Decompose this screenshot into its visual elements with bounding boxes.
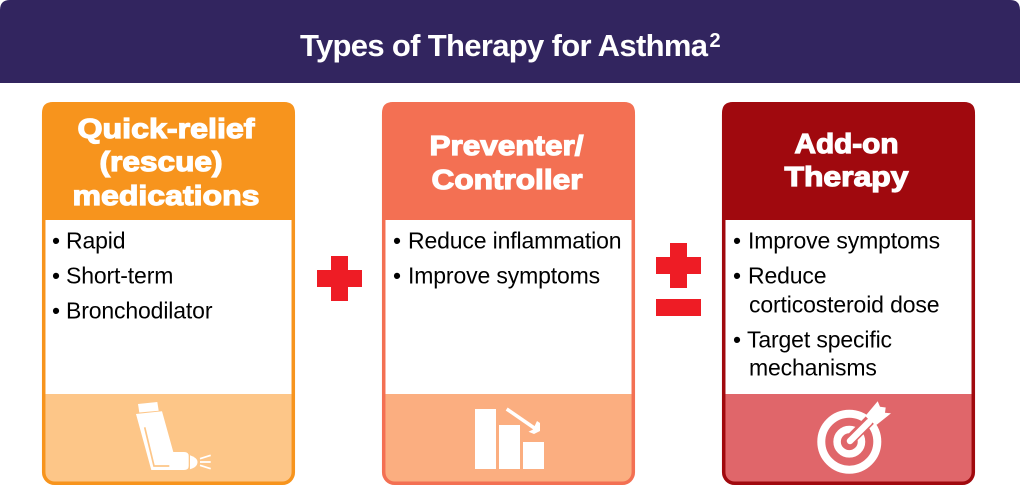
icon: declining bar chart [475,409,544,469]
panel: preventer/controller [382,102,635,483]
panel: add-on therapy [722,102,975,483]
text block: preventer bullets: • [393,228,401,254]
title banner: 2 [710,30,721,52]
heading: add-on therapy [784,128,909,192]
text block: quick-relief bullets [52,228,213,324]
text block: quick-relief bullets: • [52,298,60,324]
icon: plus-minus [656,243,701,316]
icon: inhaler [136,402,211,470]
text block: add-on bullets: • [733,262,741,288]
heading: preventer/controller: Preventer/ [430,130,584,161]
text block: preventer bullets: Improve symptoms [408,262,600,288]
heading: preventer/controller: Controller [432,164,583,195]
heading: add-on therapy: Add-on [794,128,898,159]
title banner [0,0,1020,83]
text block: add-on bullets: Reduce [748,262,826,288]
text block: preventer bullets: Reduce inflammation [408,228,621,254]
heading: quick-relief: medications [72,180,260,211]
text block: preventer bullets: • [393,262,401,288]
text block: preventer bullets [393,228,621,288]
title: Types of Therapy for Asthma [300,28,709,63]
text block: add-on bullets [733,228,940,380]
heading: add-on therapy: Therapy [784,161,909,192]
icon: plus [317,256,362,301]
text block: add-on bullets: corticosteroid dose [749,292,939,318]
text block: quick-relief bullets: Short-term [66,262,173,288]
text block: quick-relief bullets: Rapid [66,228,125,254]
text block: quick-relief bullets: Bronchodilator [66,298,213,324]
heading: quick-relief [72,113,260,211]
text block: quick-relief bullets: • [52,228,60,254]
heading: quick-relief: (rescue) [100,146,222,177]
text block: add-on bullets: mechanisms [749,354,877,380]
text block: add-on bullets: • [733,228,741,254]
heading: preventer/controller [430,130,584,195]
heading: quick-relief: Quick-relief [78,113,255,144]
panel: quick-relief medications [42,102,295,483]
icon: target with arrow [821,401,891,470]
text block: add-on bullets: Improve symptoms [748,228,940,254]
text block: quick-relief bullets: • [52,262,60,288]
text block: add-on bullets: • [733,326,741,352]
text block: add-on bullets: Target specific [747,326,892,352]
